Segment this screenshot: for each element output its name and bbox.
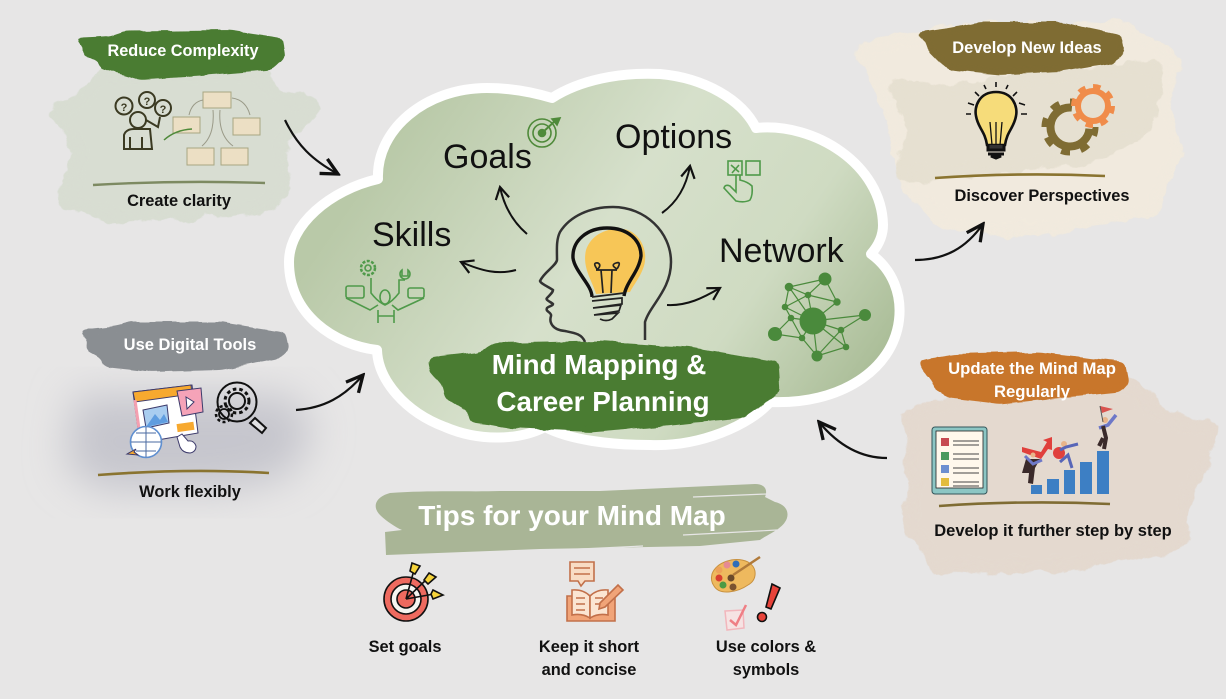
icon: confused person: ?	[160, 104, 167, 116]
panel: develop new ideas	[850, 22, 1185, 236]
panel: reduce complexity	[48, 30, 322, 224]
icon: magnifier gears	[216, 382, 266, 433]
arrow: to network	[667, 288, 720, 305]
arrow: update to cloud	[819, 422, 887, 458]
chart: rising bars	[1031, 451, 1109, 494]
icon: lightbulb	[966, 82, 1027, 158]
banner: use digital tools	[78, 322, 289, 372]
arrow: to options	[662, 166, 690, 213]
panel: update the mind map	[900, 352, 1220, 574]
divider	[939, 502, 1110, 506]
head outline	[540, 207, 671, 342]
brush backdrop	[48, 64, 322, 224]
arrow: to skills	[461, 262, 516, 272]
icon: confused person	[116, 92, 171, 149]
heading line 2: Regularly	[994, 382, 1071, 401]
label: skills: Skills	[372, 216, 451, 254]
icon: palette and symbols	[711, 557, 780, 630]
banner: update the mind map	[918, 352, 1129, 404]
caption: and concise	[542, 661, 636, 679]
bulb filament and base	[592, 263, 624, 320]
bulb outline	[573, 228, 641, 297]
caption: Discover Perspectives	[955, 187, 1129, 205]
caption: symbols	[733, 661, 799, 679]
divider	[935, 174, 1105, 178]
caption: Use colors &	[716, 638, 816, 656]
brush shape	[427, 341, 780, 432]
label: network: Network	[719, 232, 845, 270]
caption	[716, 638, 816, 679]
brush backdrop	[900, 380, 1220, 574]
arrow: cloud to new ideas	[915, 224, 983, 260]
icon: skills person	[346, 261, 424, 323]
caption: Keep it short	[539, 638, 640, 656]
icon: confused person: ?	[144, 96, 151, 108]
brush streaks	[538, 494, 777, 551]
caption	[539, 638, 640, 679]
icon: book and pencil	[567, 562, 623, 621]
icon: darts target	[384, 563, 443, 621]
icon: target	[528, 118, 560, 147]
brush backdrop	[850, 22, 1185, 236]
icon: idea notes	[164, 92, 260, 165]
panel: use digital tools	[65, 322, 315, 501]
label: options: Options	[615, 118, 732, 156]
bulb colour	[585, 229, 645, 294]
caption: Create clarity	[127, 192, 232, 210]
banner: reduce complexity	[74, 30, 285, 80]
divider	[98, 471, 269, 475]
banner: mind mapping and career planning	[427, 341, 780, 432]
arrow: reduce complexity to cloud	[285, 120, 338, 174]
icon: checklist	[932, 427, 987, 494]
heading: Reduce Complexity	[107, 42, 259, 60]
icon: network nodes	[768, 273, 870, 361]
label: goals: Goals	[443, 138, 532, 176]
cloud	[289, 74, 900, 445]
brush backdrop	[65, 395, 315, 490]
heading: Develop New Ideas	[952, 39, 1102, 57]
title line 2: Career Planning	[496, 386, 710, 417]
icon: browser and globe	[127, 385, 203, 458]
caption: Develop it further step by step	[934, 522, 1172, 540]
central figure: head with lightbulb	[540, 207, 671, 342]
banner: tips	[376, 484, 788, 555]
arrow: digital tools to cloud	[296, 375, 363, 410]
caption: Work flexibly	[139, 483, 242, 501]
banner: develop new ideas	[914, 22, 1125, 75]
panel: tips	[369, 484, 816, 679]
heading: Update the Mind Map	[948, 359, 1116, 378]
caption: Set goals	[369, 638, 441, 656]
divider	[93, 182, 265, 185]
heading: Use Digital Tools	[124, 336, 256, 354]
title: Mind Mapping &	[492, 349, 706, 380]
icon: gears	[1044, 86, 1112, 152]
icon: confused person: ?	[121, 102, 128, 114]
arrow: to goals	[500, 187, 527, 234]
heading: Tips for your Mind Map	[418, 500, 726, 531]
shade wash	[885, 60, 1170, 185]
icon: options choice	[724, 161, 760, 202]
icon: climbing people with arrow	[1022, 406, 1116, 484]
